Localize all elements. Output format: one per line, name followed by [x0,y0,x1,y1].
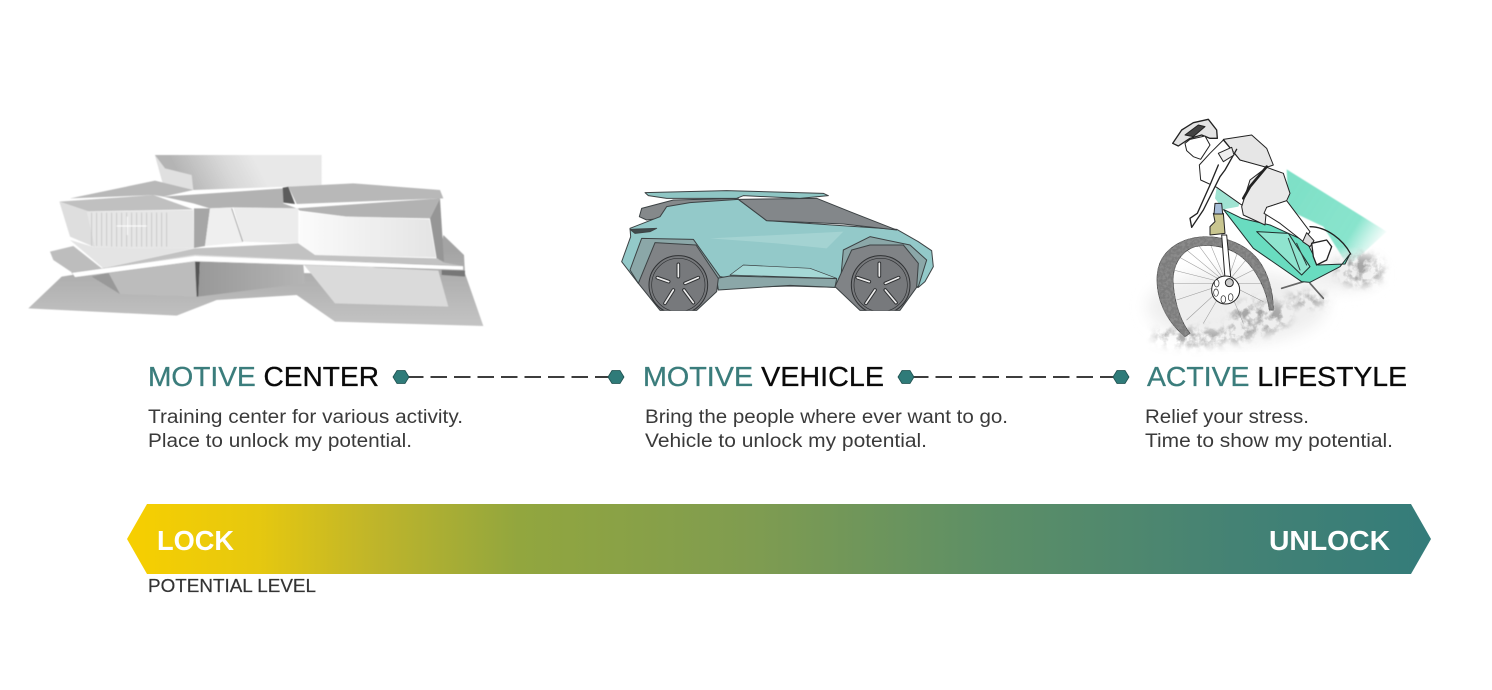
car body [622,199,933,288]
rider jersey [1199,140,1267,205]
motion backdrop [1287,169,1387,267]
disc rotor [1212,276,1240,304]
fork [1210,213,1225,235]
description: motive center: Place to unlock my potential. [148,431,412,452]
heading: active lifestyle: ACTIVE LIFESTYLE [1147,361,1407,392]
description: motive vehicle: Vehicle to unlock my potential. [645,431,927,452]
connector arrow: vehicle to lifestyle [898,370,1129,384]
backpack [1223,135,1273,167]
pale haze [1147,257,1380,343]
description: motive center [148,407,463,452]
description: motive center: Training center for various activity. [148,407,463,428]
teal frame [1223,209,1350,282]
dust cloud [1153,255,1383,345]
shoe [1312,240,1332,265]
illustration: motive center building [28,155,483,326]
head [1185,136,1210,159]
bar label: lock: LOCK [157,525,234,556]
shorts [1242,167,1290,225]
description: active lifestyle: Time to show my potential. [1145,431,1393,452]
wheel arches [638,243,718,310]
description: active lifestyle [1145,407,1393,452]
spokes [1172,243,1265,323]
leg [1264,201,1310,242]
heading: motive vehicle: MOTIVE VEHICLE [643,361,884,392]
gradient bar: potential level [127,504,1431,574]
description: active lifestyle: Relief your stress. [1145,407,1309,428]
handlebar arm [1190,149,1237,227]
car rear shell [639,198,738,220]
helmet [1173,119,1217,146]
heading: motive center: MOTIVE CENTER [148,361,379,392]
bar label: unlock: UNLOCK [1269,525,1390,556]
description: motive vehicle [645,407,1008,452]
rear stays [1282,282,1323,298]
caption: potential level: POTENTIAL LEVEL [148,575,316,596]
illustration: active lifestyle mountain biker [1147,119,1387,345]
illustration: motive vehicle [622,191,933,314]
connector arrow: center to vehicle [393,370,624,384]
front tire [1157,237,1273,337]
roof rack [645,191,828,198]
description: motive vehicle: Bring the people where ever want to go. [645,407,1008,428]
car window [738,198,897,230]
